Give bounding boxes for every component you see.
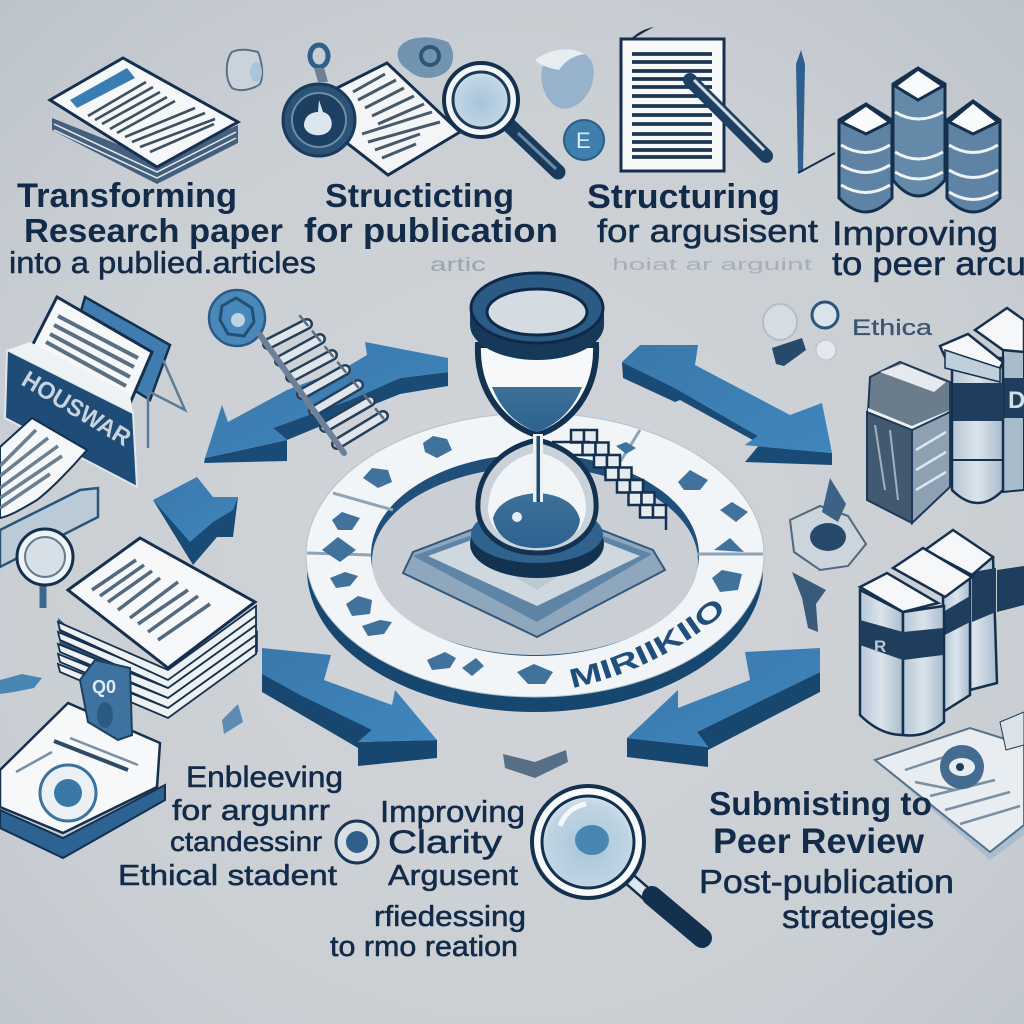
- heading: transforming research paper: [9, 177, 316, 280]
- icon: blue splotch left: [0, 674, 42, 694]
- paper on board: [30, 297, 152, 408]
- text block: enbleeving for argument: ctandessinr: [170, 826, 322, 857]
- icon: stacked papers top left: [50, 58, 238, 184]
- icon: document and magnifier top centre: [283, 63, 558, 175]
- icon: box upper right: [867, 362, 950, 523]
- bottom ring: [470, 505, 604, 578]
- icon: small seal: [336, 821, 378, 863]
- icon: ethics cluster: Ethica: [852, 315, 933, 340]
- banner on paper: [70, 68, 135, 108]
- icon: faint clip outline: [227, 50, 262, 90]
- small chevron marker: [503, 750, 568, 778]
- icon: E badge: [564, 120, 604, 160]
- icon: document with pen: [620, 27, 766, 171]
- heading: transforming research paper: Research paper: [24, 212, 283, 249]
- heading: transforming research paper: into a publied.articles: [9, 245, 316, 280]
- arrow: top left double: [204, 342, 448, 463]
- icon: papers lower right: [875, 712, 1024, 860]
- curled paper: [0, 418, 87, 518]
- text block: improving clarity argument: Argusent: [388, 860, 518, 892]
- arrow: lower right double: [627, 648, 820, 767]
- book under paper: [0, 488, 98, 567]
- text block: enbleeving for argument: for argunrr: [172, 795, 330, 827]
- icon: large magnifier: [532, 786, 702, 938]
- lower bulb: [478, 440, 596, 553]
- icon: books lower right: [860, 530, 1024, 735]
- icon: silver staircase: [260, 316, 388, 453]
- board: HOUSWAR: [17, 366, 135, 452]
- text block: submitting to peer review: strategies: [782, 898, 934, 935]
- icon: E badge: E: [576, 128, 591, 153]
- text block: submitting to peer review: Post-publication: [699, 863, 954, 900]
- heading: transforming research paper: Transforming: [17, 177, 237, 215]
- magnifier handle: [510, 126, 558, 172]
- board: [5, 342, 137, 487]
- glass stem: [533, 434, 543, 502]
- heading: improving to peer: [832, 215, 1024, 282]
- icon: globe: [209, 290, 265, 346]
- blue folder and stand: [70, 297, 185, 448]
- arrow: lower left double: [262, 648, 437, 766]
- icon: stacked cylinders top right: [839, 68, 1000, 212]
- tag: Q0: [92, 677, 116, 697]
- ring label: MIRIIKIIO: [570, 601, 722, 688]
- text block: enbleeving for argument: Enbleeving: [186, 761, 343, 794]
- heading: structicting for publication: for publication: [304, 212, 558, 250]
- magnifier lens: [444, 63, 518, 137]
- icon: paper stack lower left: [58, 538, 258, 718]
- icon: small dark stairs: [552, 430, 666, 530]
- icon: books lower right: R: [874, 637, 886, 656]
- text block: improving clarity argument: rfiedessing: [374, 901, 526, 933]
- heading: structicting for publication: [304, 177, 558, 276]
- text block: improving clarity argument: Clarity: [388, 824, 502, 860]
- left icons: board with papers: [0, 297, 185, 608]
- text block: improving clarity argument: to rmo reation: [330, 931, 518, 963]
- seal: [40, 765, 96, 821]
- icon: books upper right: [940, 308, 1024, 503]
- icon: book and seal lower left: [0, 660, 165, 858]
- top ring: [470, 273, 604, 360]
- tag: [80, 660, 132, 740]
- heading: structicting for publication: artic: [430, 255, 486, 276]
- heading: structuring for argument: hoiat ar arguint: [612, 255, 812, 274]
- text block: enbleeving for argument: [118, 761, 343, 892]
- heading: structuring for argument: Structuring: [587, 178, 780, 216]
- upper bulb: [478, 345, 596, 435]
- ring: process wheel: [306, 414, 764, 712]
- ring markers: [322, 436, 748, 684]
- icon: blue blob cluster: [398, 37, 453, 78]
- small magnifier: [17, 529, 73, 608]
- icon: small figure: [790, 478, 866, 632]
- text block: submitting to peer review: Peer Review: [713, 822, 925, 861]
- text block: submitting to peer review: [699, 785, 954, 935]
- platform under hourglass: [403, 505, 665, 637]
- arrow: top right double: [622, 345, 832, 465]
- pen: [690, 80, 766, 156]
- heading: structicting for publication: Structicting: [325, 177, 514, 214]
- text block: enbleeving for argument: Ethical stadent: [118, 860, 337, 892]
- text block: submitting to peer review: Submisting to: [709, 785, 932, 822]
- icon: small key: [310, 45, 328, 82]
- heading: structuring for argument: for argusisent: [597, 213, 818, 249]
- heading: improving to peer: to peer arcu: [832, 245, 1024, 282]
- arrow: small left: [153, 477, 238, 565]
- icon: ethics cluster: [763, 302, 933, 366]
- text block: improving clarity argument: Improving: [380, 794, 525, 829]
- icon: spike and line: [796, 50, 835, 173]
- heading: improving to peer: Improving: [832, 215, 998, 253]
- hourglass: [470, 273, 604, 578]
- text block: improving clarity argument: [330, 794, 526, 963]
- seal circle: [283, 84, 355, 156]
- heading: structuring for argument: [587, 178, 818, 274]
- icon: small shard: [222, 704, 243, 734]
- icon: faint blue swirl: [535, 49, 594, 109]
